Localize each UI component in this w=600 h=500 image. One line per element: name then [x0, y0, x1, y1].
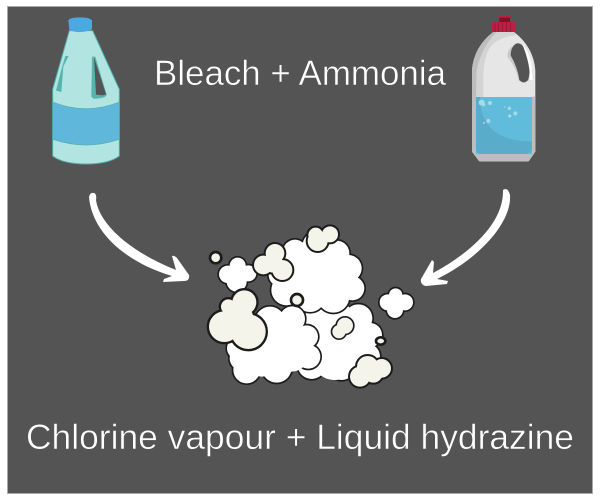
puff: large cream — [209, 290, 266, 349]
puff: upper left cream — [254, 244, 292, 280]
droplets — [210, 252, 385, 345]
arrow: right — [421, 189, 510, 286]
title: reactants: Bleach + Ammonia — [154, 54, 447, 93]
caption: products: Chlorine vapour + Liquid hydrazine — [26, 418, 574, 457]
cloud: small right — [380, 288, 413, 318]
cloud: upper — [269, 231, 364, 313]
cloud: lower left — [227, 306, 320, 383]
puff: top cream — [308, 226, 338, 251]
icon: bleach bottle — [53, 17, 119, 164]
icon: ammonia bottle — [472, 15, 535, 161]
puff: bottom right cream — [350, 356, 391, 387]
puff: middle cream — [332, 318, 353, 338]
icon: vapour cloud — [209, 226, 413, 387]
arrow: left — [89, 193, 189, 282]
cloud: small left — [219, 258, 256, 292]
cloud: lower right — [298, 302, 382, 380]
